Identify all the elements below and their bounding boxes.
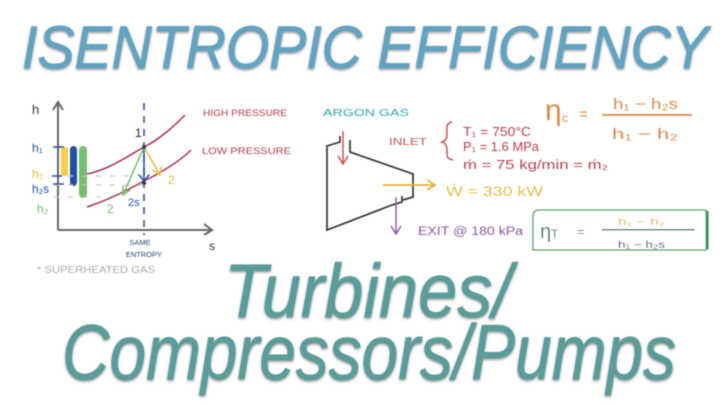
turbine efficiency box: h₁ − h₂s — [618, 239, 665, 251]
state labels: 1 — [135, 126, 142, 140]
superheated note: * SUPERHEATED GAS — [37, 265, 155, 276]
compressor efficiency formula: η — [545, 94, 562, 127]
s axis label: s — [209, 239, 215, 253]
enthalpy labels: h₂ — [37, 202, 49, 216]
high pressure curve — [87, 115, 185, 174]
inlet data: T₁ = 750°C — [463, 124, 531, 139]
enthalpy labels: h₁ — [32, 141, 43, 155]
state points — [142, 145, 146, 185]
state labels: 2 — [168, 173, 175, 187]
turbine efficiency box — [533, 210, 708, 251]
compressor efficiency formula: = — [579, 106, 588, 123]
inlet data — [463, 124, 608, 172]
turbine efficiency box: η — [540, 221, 551, 243]
work value: Ẇ = 330 kW — [446, 184, 543, 199]
axes — [53, 102, 212, 235]
inlet data: ṁ = 75 kg/min = ṁ₂ — [463, 157, 608, 172]
state labels: 2s — [128, 197, 140, 209]
enthalpy labels: h₂s — [32, 182, 49, 196]
enthalpy difference bars — [61, 146, 87, 198]
turbine shape — [327, 136, 413, 230]
inlet brace — [442, 122, 453, 160]
turbine efficiency box: h₁ − h₂ — [618, 217, 665, 228]
same entropy dashed line — [143, 103, 145, 235]
inlet data: P₁ = 1.6 MPa — [463, 139, 540, 154]
h axis label: h — [32, 102, 39, 117]
enthalpy labels — [32, 141, 49, 216]
compressor efficiency formula: h₁ − h₂ — [612, 126, 678, 143]
inlet label: INLET — [389, 137, 427, 148]
compressor efficiency formula: c — [562, 111, 568, 125]
process arrows — [123, 147, 161, 195]
compressor efficiency formula — [545, 94, 692, 143]
inlet arrow — [338, 131, 348, 164]
same entropy label: SAME — [129, 238, 151, 247]
same entropy label: ENTROPY — [126, 250, 162, 259]
exit arrow — [391, 197, 401, 234]
panel: h-s diagram: LOW PRESSURE — [202, 146, 291, 157]
turbine efficiency box: = — [577, 224, 585, 239]
panel: h-s diagram — [32, 102, 291, 276]
state labels — [107, 126, 175, 216]
subtitle line 1: Turbines/ — [224, 249, 518, 334]
low pressure curve — [87, 150, 191, 207]
exit label: EXIT @ 180 kPa — [418, 226, 524, 238]
enthalpy labels: h₂ — [32, 167, 44, 181]
dashed level lines — [54, 176, 160, 197]
pressure labels: HIGH PRESSURE — [203, 108, 287, 119]
turbine efficiency box: T — [551, 227, 559, 241]
subtitle — [62, 249, 676, 396]
same entropy label — [126, 238, 162, 259]
state labels: 2 — [107, 202, 114, 216]
compressor efficiency formula: h₁ − h₂s — [613, 96, 678, 113]
axis ticks — [52, 147, 64, 184]
argon gas label: ARGON GAS — [323, 108, 409, 119]
work arrow — [383, 180, 435, 190]
panel: turbine problem — [323, 94, 708, 251]
